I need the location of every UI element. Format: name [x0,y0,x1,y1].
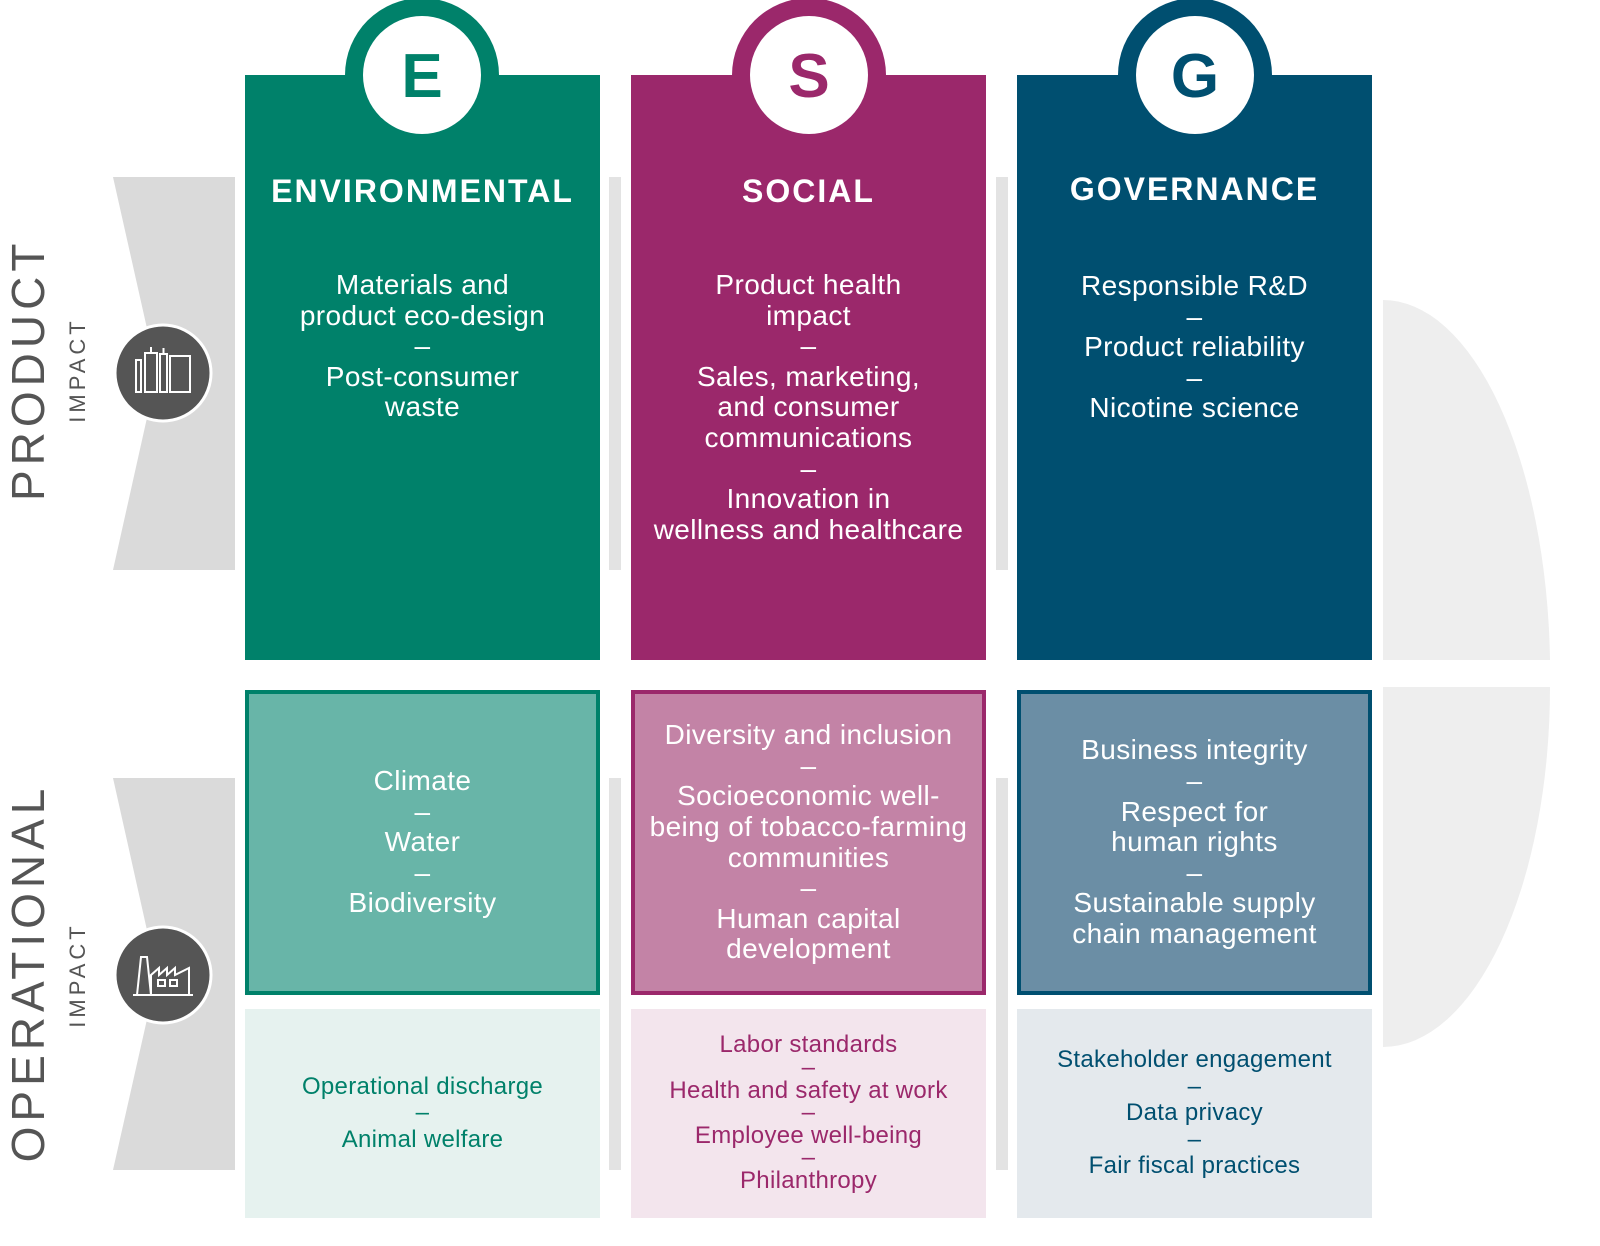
operational box: environmental: – [414,857,430,888]
arrow: operational row [113,778,235,1170]
right arc [1383,300,1550,1047]
panel: social product: – [800,330,816,361]
operational box: social: Diversity and inclusion [665,719,952,750]
light box: governance: – [1188,1073,1201,1100]
panel: social product: Innovation in [726,483,890,514]
panel: environmental product [245,75,600,660]
panel: environmental product: – [414,330,430,361]
icon: products [116,324,212,422]
icon: factory [116,926,212,1024]
operational box: social: – [800,872,816,903]
panel: governance product: Responsible R&D [1081,270,1308,301]
letter circles [363,16,1254,134]
panel: social product: wellness and healthcare [654,514,963,545]
operational box: environmental: – [414,796,430,827]
operational box: governance: chain management [1072,918,1317,949]
light box: environmental: Operational discharge [302,1073,543,1100]
light box: social: – [802,1099,815,1126]
panel: social product [631,75,986,660]
operational box: governance: Business integrity [1081,734,1308,765]
light box: social: – [802,1144,815,1171]
operational box: environmental: Water [385,826,460,857]
panel: governance product [1017,75,1372,660]
operational box: governance: Respect for [1121,796,1268,827]
operational box: social [631,690,986,995]
panel: environmental product: Post-consumer [326,361,519,392]
panel: governance product: GOVERNANCE [1070,171,1319,207]
label: product impact [2,239,90,501]
panel: social product: and consumer [717,391,900,422]
label: product impact: IMPACT [65,317,90,423]
light box: environmental: – [416,1099,429,1126]
panel: social product: SOCIAL [742,173,875,209]
label: operational impact [2,784,90,1162]
light box: social: – [802,1054,815,1081]
operational box: environmental: Climate [374,765,471,796]
operational box: social: Socioeconomic well- [677,780,940,811]
operational box: social: – [800,750,816,781]
operational box: governance [1017,690,1372,995]
light box: environmental: Animal welfare [342,1126,503,1153]
operational box: governance: human rights [1111,826,1278,857]
operational box: social: communities [728,842,889,872]
light box: governance: Stakeholder engagement [1057,1046,1332,1073]
header circles [345,0,1272,152]
panel: social product: impact [766,300,851,331]
operational box: environmental [245,690,600,995]
panel: social product: communications [705,422,912,453]
panel: governance product: – [1186,362,1202,393]
panel: governance product: Nicotine science [1089,392,1300,423]
panel: social product: – [800,453,816,484]
operational box: social: development [726,933,891,964]
operational box: governance: – [1186,857,1202,888]
light box: environmental [245,1009,600,1218]
panel: environmental product: Materials and [336,269,509,300]
light box: governance: Fair fiscal practices [1089,1152,1300,1179]
light box: governance: Data privacy [1126,1099,1263,1126]
operational box: governance: – [1186,765,1202,796]
arrow: product row [113,177,235,570]
operational box: environmental: Biodiversity [349,887,496,918]
operational box: social: Human capital [716,903,901,934]
panel: environmental product: ENVIRONMENTAL [271,173,574,209]
panel: social product: Sales, marketing, [697,361,920,392]
light box: social: Employee well-being [695,1122,922,1149]
light box: governance: – [1188,1126,1201,1153]
letter circles: G [1171,42,1219,111]
panel: governance product: – [1186,301,1202,332]
letter circles: S [788,42,830,111]
letter circles: E [401,42,443,111]
panel: environmental product: waste [385,391,460,422]
light box: social: Health and safety at work [669,1077,948,1104]
label: operational impact: OPERATIONAL [2,784,54,1162]
label: operational impact: IMPACT [65,922,90,1028]
separator bars [609,177,1008,1170]
panel: governance product: Product reliability [1084,331,1305,362]
panel: social product: Product health [715,269,902,300]
label: product impact: PRODUCT [2,239,54,501]
panel: environmental product: product eco-design [300,300,545,331]
operational box: social: being of tobacco-farming [650,811,967,842]
light box: governance [1017,1009,1372,1218]
operational box: governance: Sustainable supply [1073,887,1316,918]
light box: social [631,1009,986,1218]
light box: social: Philanthropy [740,1167,877,1194]
light box: social: Labor standards [720,1031,897,1058]
